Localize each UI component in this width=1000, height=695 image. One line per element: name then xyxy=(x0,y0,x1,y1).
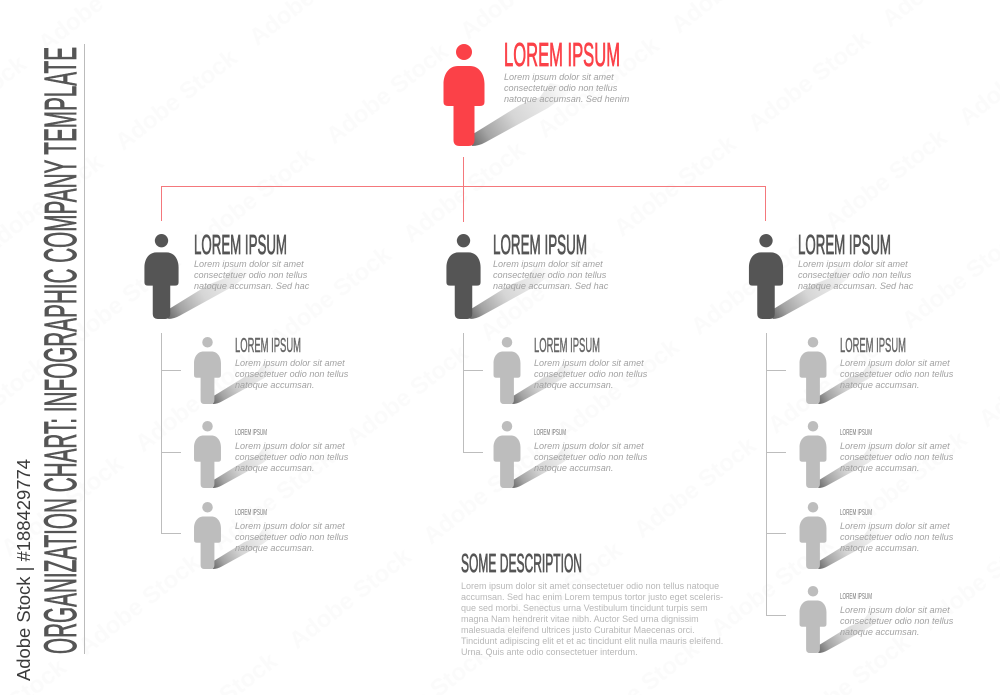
team member: middle 1: Lorem ipsum dolor sit amet xyxy=(534,358,644,368)
team member: left 3 xyxy=(194,502,349,569)
team member: right 2: LOREM IPSUM xyxy=(840,427,872,437)
top node: red person and text: LOREM IPSUM xyxy=(504,36,620,73)
team member: right 1 xyxy=(800,335,954,404)
team member: left 3: consectetuer odio non tellus xyxy=(235,532,349,542)
team member: right 3 xyxy=(800,502,954,569)
team member: left 1: LOREM IPSUM xyxy=(235,335,301,357)
description block: Tincidunt adipiscing elit et et ac tincidunt elit nulla mauris eleifend. xyxy=(461,636,723,646)
team member: left 1: consectetuer odio non tellus xyxy=(235,369,349,379)
team member: right 1: consectetuer odio non tellus xyxy=(840,369,954,379)
team member: right 2: natoque accumsan. xyxy=(840,463,919,473)
team member: right 4: LOREM IPSUM xyxy=(840,591,872,601)
team member: right 3: Lorem ipsum dolor sit amet xyxy=(840,521,950,531)
connector lines: left column xyxy=(162,333,181,534)
connector lines: middle column xyxy=(464,333,483,452)
team member: left 3: natoque accumsan. xyxy=(235,543,314,553)
team member: middle 2: LOREM IPSUM xyxy=(534,427,566,437)
team member: left 2: LOREM IPSUM xyxy=(235,427,267,437)
stock credit: Adobe Stock | #188429774 xyxy=(13,459,34,681)
team member: left 1: Lorem ipsum dolor sit amet xyxy=(235,358,345,368)
manager node: left xyxy=(144,229,310,319)
team member: right 3: LOREM IPSUM xyxy=(840,507,872,517)
team member: right 1: LOREM IPSUM xyxy=(840,335,906,357)
team member: right 4: Lorem ipsum dolor sit amet xyxy=(840,605,950,615)
top node: red person and text: natoque accumsan. Sed henim xyxy=(504,94,630,104)
team member: right 4 xyxy=(800,586,954,653)
manager node: left: Lorem ipsum dolor sit amet xyxy=(194,259,304,269)
team member: middle 2 xyxy=(494,421,648,488)
manager node: middle xyxy=(446,229,609,319)
top node: red person and text: Lorem ipsum dolor sit amet xyxy=(504,72,614,82)
description block: que sed morbi. Senectus urna Vestibulum tincidunt turpis sem xyxy=(461,603,708,613)
team member: middle 2: natoque accumsan. xyxy=(534,463,613,473)
team member: middle 1: consectetuer odio non tellus xyxy=(534,369,648,379)
team member: left 2: consectetuer odio non tellus xyxy=(235,452,349,462)
manager node: right: Lorem ipsum dolor sit amet xyxy=(798,259,908,269)
team member: right 3: natoque accumsan. xyxy=(840,543,919,553)
description block xyxy=(461,548,723,657)
team member: right 2: consectetuer odio non tellus xyxy=(840,452,954,462)
team member: right 2 xyxy=(800,421,954,488)
manager node: middle: consectetuer odio non tellus xyxy=(493,270,607,280)
description block: Lorem ipsum dolor sit amet consectetuer odio non tellus natoque xyxy=(461,581,719,591)
team member: right 4: natoque accumsan. xyxy=(840,627,919,637)
team member: left 3: LOREM IPSUM xyxy=(235,507,267,517)
manager node: left: consectetuer odio non tellus xyxy=(194,270,308,280)
team member: right 1: natoque accumsan. xyxy=(840,380,919,390)
manager node: middle: LOREM IPSUM xyxy=(493,229,587,260)
team member: middle 1 xyxy=(494,335,648,404)
team member: right 2: Lorem ipsum dolor sit amet xyxy=(840,441,950,451)
team member: middle 2: Lorem ipsum dolor sit amet xyxy=(534,441,644,451)
manager node: middle: natoque accumsan. Sed hac xyxy=(493,281,609,291)
top node: red person and text xyxy=(444,36,630,146)
manager node: right: natoque accumsan. Sed hac xyxy=(798,281,914,291)
description block: Urna. Quis ante odio consectetuer interdum. xyxy=(461,647,638,657)
team member: right 3: consectetuer odio non tellus xyxy=(840,532,954,542)
top node: red person and text: consectetuer odio non tellus xyxy=(504,83,618,93)
manager node: right: consectetuer odio non tellus xyxy=(798,270,912,280)
manager node: right: LOREM IPSUM xyxy=(798,229,891,260)
team member: middle 1: LOREM IPSUM xyxy=(534,335,600,357)
manager node: left: natoque accumsan. Sed hac xyxy=(194,281,310,291)
team member: left 3: Lorem ipsum dolor sit amet xyxy=(235,521,345,531)
team member: left 2: Lorem ipsum dolor sit amet xyxy=(235,441,345,451)
connector lines: right column xyxy=(766,333,786,616)
manager node: left: LOREM IPSUM xyxy=(194,229,287,260)
description block: accumsan. Sed hac enim Lorem tempus tortor justo eget sceleris- xyxy=(461,592,723,602)
connector lines: red hierarchy xyxy=(162,157,766,222)
description block: malesuada eleifend ultrices justo Curabitur Maecenas orci. xyxy=(461,625,695,635)
team member: middle 1: natoque accumsan. xyxy=(534,380,613,390)
team member: right 1: Lorem ipsum dolor sit amet xyxy=(840,358,950,368)
team member: middle 2: consectetuer odio non tellus xyxy=(534,452,648,462)
description block: SOME DESCRIPTION xyxy=(461,548,582,578)
manager node: right xyxy=(749,229,914,319)
team member: right 4: consectetuer odio non tellus xyxy=(840,616,954,626)
manager node: middle: Lorem ipsum dolor sit amet xyxy=(493,259,603,269)
team member: left 2: natoque accumsan. xyxy=(235,463,314,473)
team member: left 2 xyxy=(194,421,349,488)
description block: magna Nam hendrerit vitae nibh. Auctor Sed urna dignissim xyxy=(461,614,699,624)
team member: left 1: natoque accumsan. xyxy=(235,380,314,390)
team member: left 1 xyxy=(194,335,349,404)
